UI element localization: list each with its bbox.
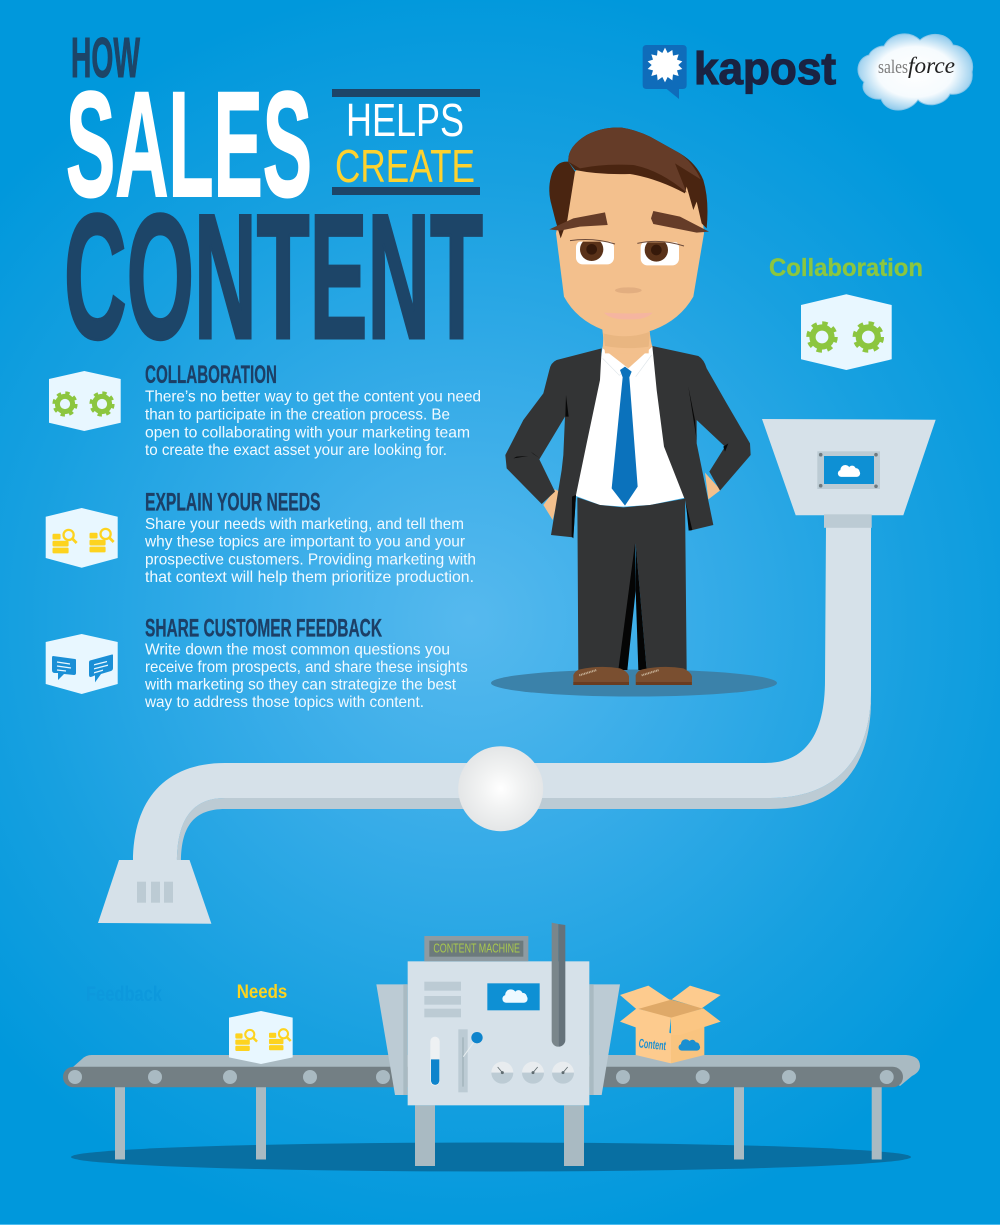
text block: explain your needs: prospective customers. Providing marketing with — [145, 551, 476, 568]
title: SALES — [66, 60, 312, 228]
text block: share customer feedback: with marketing so they can strategize the best — [144, 676, 457, 694]
machine legs — [415, 1105, 584, 1166]
machine screen — [487, 983, 540, 1010]
man shadow — [491, 670, 777, 696]
text block: collaboration: than to participate in the creation process. Be — [145, 406, 450, 424]
faint label: feedback: Feedback — [86, 983, 162, 1006]
title: HOW — [71, 26, 140, 90]
machine wings — [376, 984, 620, 1095]
pipe shadow — [177, 690, 871, 862]
text block: explain your needs: that context will help them prioritize production. — [145, 569, 474, 586]
lever — [458, 1029, 483, 1092]
text block: collaboration: There’s no better way to get the content you need — [145, 389, 481, 406]
pipe body — [133, 527, 871, 862]
floor shadow — [71, 1142, 911, 1172]
icon: collaboration cube falling — [801, 294, 892, 370]
man body — [505, 330, 751, 685]
heading: explain your needs: EXPLAIN YOUR NEEDS — [145, 489, 320, 517]
heading: collaboration: COLLABORATION — [145, 361, 277, 389]
character: man — [505, 128, 751, 685]
text block: explain your needs — [144, 516, 476, 586]
title — [64, 26, 483, 376]
logo: salesforce: sales — [878, 57, 908, 78]
text block: collaboration — [145, 389, 481, 459]
text: CONTENT — [64, 177, 483, 376]
machine body — [408, 961, 589, 1105]
text block: share customer feedback: receive from prospects, and share these insights — [145, 659, 468, 676]
pipe — [98, 419, 936, 924]
logo: kapost: kapost — [694, 43, 836, 94]
title: HELPS — [346, 94, 464, 146]
icon: feedback cube — [46, 634, 118, 694]
logo: salesforce — [858, 34, 973, 110]
text block: collaboration: open to collaborating with your marketing team — [145, 424, 470, 441]
chimney — [552, 923, 565, 1047]
nozzle — [98, 860, 211, 924]
heading: share customer feedback: SHARE CUSTOMER FEEDBACK — [145, 615, 382, 643]
content machine — [376, 923, 721, 1166]
logo: salesforce: force — [908, 53, 955, 78]
logo: kapost — [643, 43, 836, 99]
icon: needs cube on belt — [229, 1011, 293, 1064]
text block: share customer feedback: way to address those topics with content. — [144, 694, 424, 711]
dials — [491, 1062, 574, 1084]
text block: explain your needs: Share your needs with marketing, and tell them — [145, 516, 464, 533]
section: share customer feedback — [46, 615, 468, 711]
icon: needs cube — [46, 508, 118, 568]
machine sign — [424, 936, 528, 961]
thermometer — [430, 1037, 440, 1086]
vents — [424, 982, 461, 1017]
icon: collaboration cube — [49, 371, 121, 431]
text block: collaboration: to create the exact asset your are looking for. — [145, 442, 447, 459]
label: collaboration: Collaboration — [769, 254, 923, 282]
title: CREATE — [335, 140, 475, 192]
pipe ball joint — [458, 746, 543, 831]
man head — [549, 128, 709, 353]
text block: share customer feedback — [144, 641, 468, 711]
text block: share customer feedback: Write down the most common questions you — [145, 641, 450, 658]
hopper — [762, 419, 936, 528]
open box — [620, 986, 721, 1063]
label: needs: Needs — [237, 982, 287, 1003]
open box: Content — [638, 1036, 667, 1053]
machine sign: CONTENT MACHINE — [433, 941, 520, 956]
section: collaboration — [49, 361, 481, 459]
text block: explain your needs: why these topics are important to you and your — [144, 534, 465, 551]
section: explain your needs — [46, 489, 476, 586]
conveyor belt — [63, 1055, 920, 1160]
